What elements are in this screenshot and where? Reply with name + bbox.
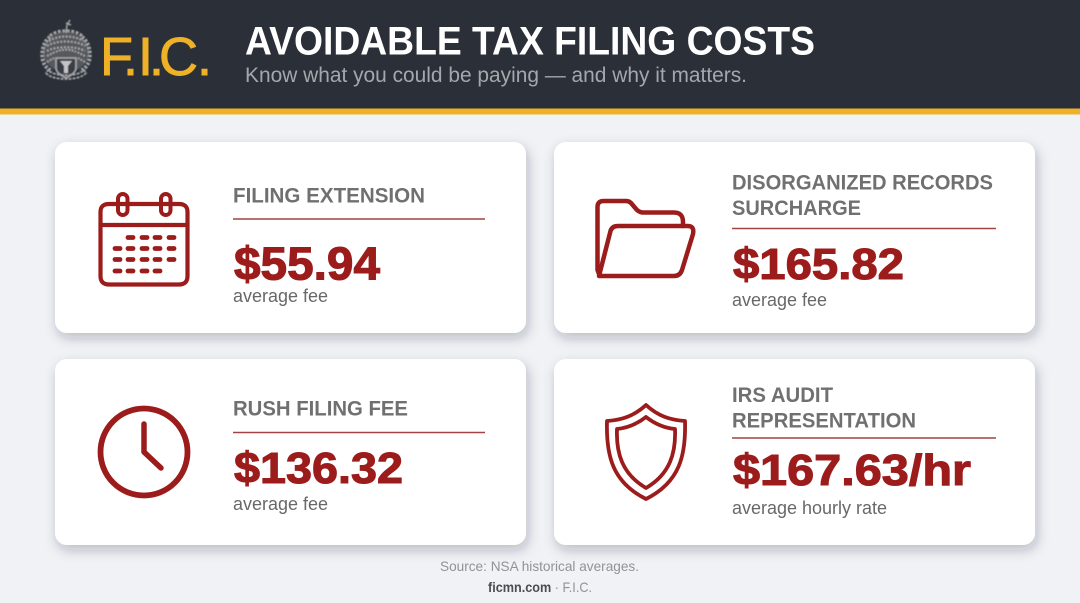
heading: RUSH FILING FEE [233, 396, 408, 420]
caption: average fee [233, 286, 328, 306]
logo wordmark: F.I.C. [100, 27, 212, 87]
source note: Source: NSA historical averages. [440, 558, 639, 574]
panel: irs audit representation [554, 359, 1035, 545]
caption: average fee [233, 494, 328, 514]
icon: folder [598, 201, 693, 276]
logo crest [42, 20, 90, 79]
heading: REPRESENTATION [732, 408, 916, 432]
heading: FILING EXTENSION [233, 184, 425, 208]
heading [732, 383, 916, 432]
heading: DISORGANIZED RECORDS [732, 170, 993, 194]
value: $55.94 [234, 238, 380, 290]
header band [0, 0, 1080, 114]
value: $167.63/hr [733, 446, 971, 495]
heading: SURCHARGE [732, 196, 861, 220]
caption: average fee [732, 290, 827, 310]
subtitle: Know what you could be paying — and why it matters. [245, 64, 747, 87]
value: $165.82 [733, 240, 904, 289]
footer credit: ficmn.com · F.I.C. [488, 579, 592, 595]
title: AVOIDABLE TAX FILING COSTS [245, 20, 815, 64]
heading [732, 170, 993, 220]
heading: IRS AUDIT [732, 383, 833, 407]
panel: rush filing fee [55, 359, 526, 545]
caption: average hourly rate [732, 498, 887, 518]
panel: disorganized records surcharge [554, 142, 1035, 333]
icon: clock [100, 408, 188, 496]
icon: shield [607, 405, 685, 499]
value: $136.32 [234, 444, 403, 493]
panel: filing extension [55, 142, 526, 333]
icon: calendar [100, 194, 188, 284]
